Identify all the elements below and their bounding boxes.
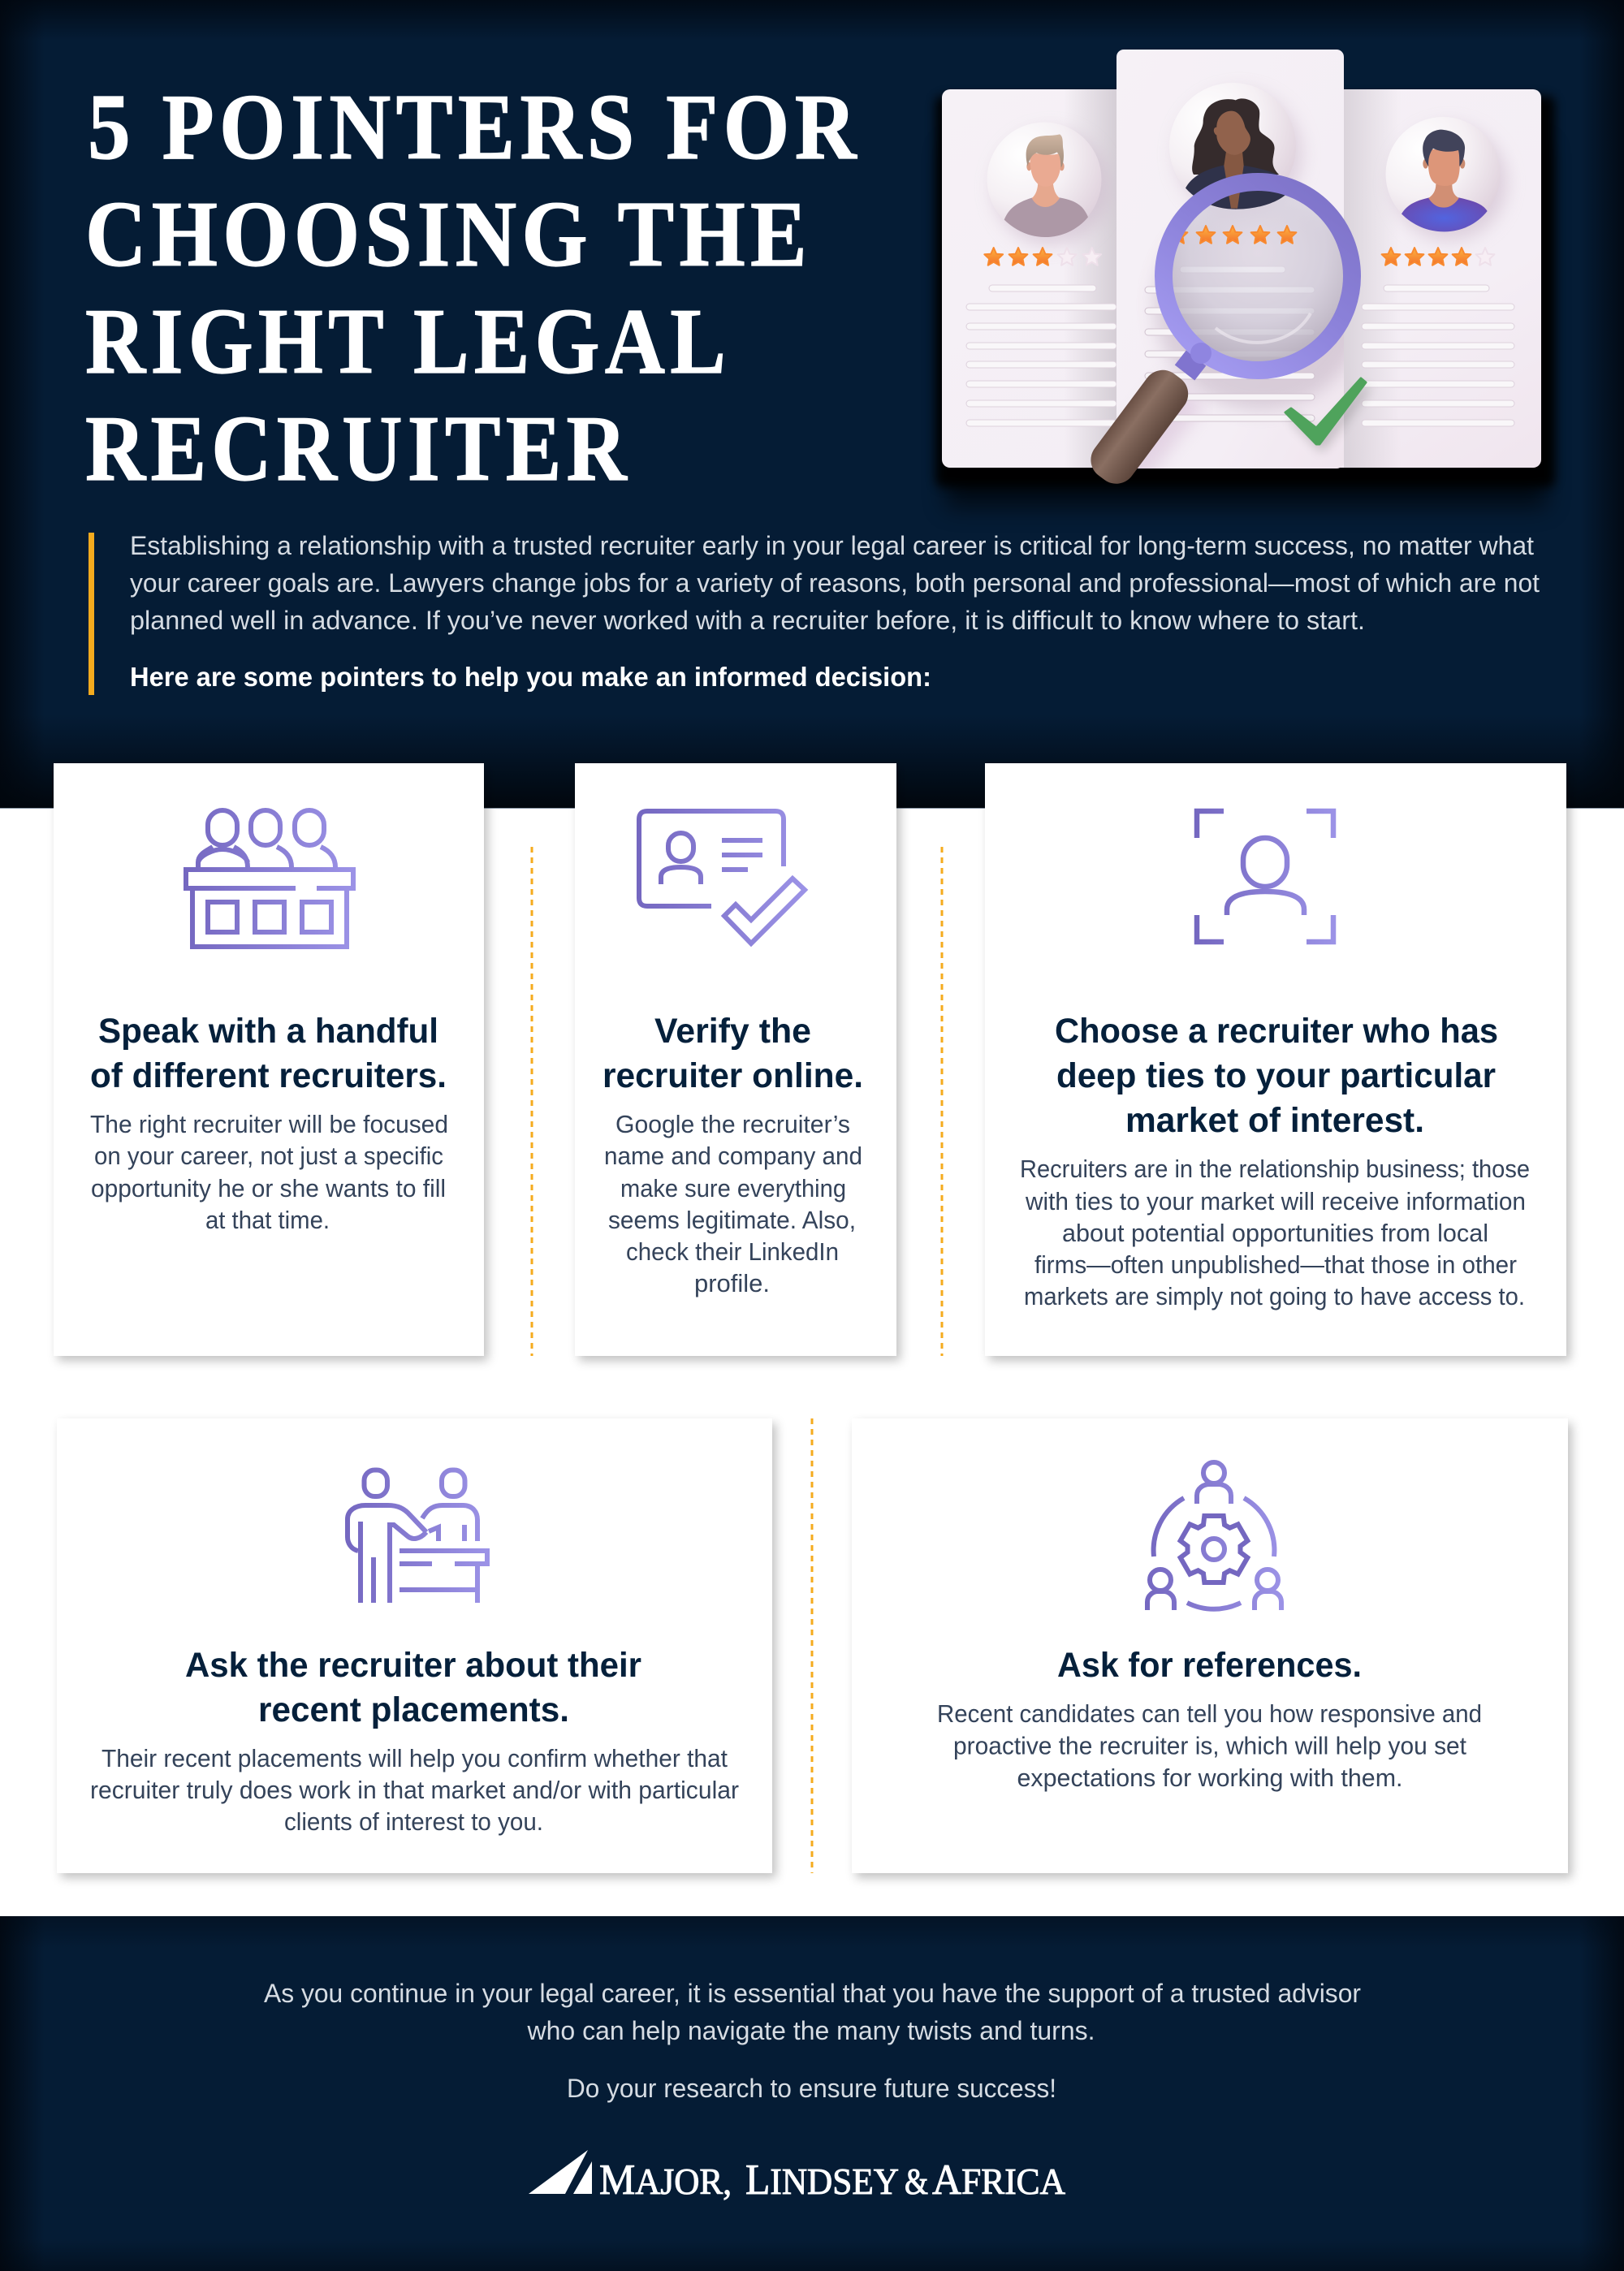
intro text xyxy=(130,531,1540,692)
right text lines xyxy=(1362,285,1514,426)
heading: Verify the xyxy=(654,1012,811,1051)
heading: Choose a recruiter who has xyxy=(1055,1012,1498,1051)
center stars xyxy=(1169,226,1296,244)
body text: opportunity he or she wants to fill xyxy=(91,1174,446,1202)
left and right profile sheet xyxy=(942,89,1541,468)
title: 5 POINTERS FOR xyxy=(88,76,862,179)
heading: of different recruiters. xyxy=(90,1056,447,1095)
body text: proactive the recruiter is, which will help you set xyxy=(953,1731,1466,1760)
footer text: who can help navigate the many twists and turns. xyxy=(527,2016,1095,2045)
body text: seems legitimate. Also, xyxy=(608,1206,856,1234)
footer text: As you continue in your legal career, it is essential that you have the support of a trusted advisor xyxy=(264,1979,1361,2008)
body text: Their recent placements will help you confirm whether that xyxy=(102,1744,728,1772)
heading xyxy=(1055,1012,1498,1140)
panel: verify the recruiter xyxy=(575,763,896,1356)
body text: Recent candidates can tell you how responsive and xyxy=(937,1699,1482,1728)
title: CHOOSING THE xyxy=(85,183,812,287)
center sheet soft shading xyxy=(1138,91,1344,468)
icon: sails xyxy=(529,2150,592,2194)
heading: recruiter online. xyxy=(603,1056,863,1095)
body text: Google the recruiter’s xyxy=(615,1110,850,1138)
footer text: Do your research to ensure future success! xyxy=(567,2074,1056,2103)
body text xyxy=(90,1110,448,1234)
body text xyxy=(937,1699,1482,1792)
heading: market of interest. xyxy=(1125,1101,1424,1140)
left stars xyxy=(984,248,1101,266)
intro text: planned well in advance. If you’ve never worked with a recruiter before, it is difficult to know where to start. xyxy=(130,606,1365,635)
body text: check their LinkedIn xyxy=(626,1237,839,1266)
icon: two people shaking hands over desk xyxy=(348,1470,487,1603)
heading: Speak with a handful xyxy=(98,1012,438,1051)
icon: people around gear xyxy=(1147,1462,1281,1610)
intro accent bar xyxy=(89,533,94,695)
heading: Ask for references. xyxy=(1057,1646,1362,1685)
footer band xyxy=(0,1916,1624,2271)
intro text: Establishing a relationship with a trusted recruiter early in your legal career is critical for long-term success, no matter what xyxy=(130,531,1534,560)
logo: Major, Lindsey & Africa: AFRICA xyxy=(932,2157,1065,2204)
body text: make sure everything xyxy=(620,1174,846,1202)
heading: deep ties to your particular xyxy=(1056,1056,1496,1095)
logo: Major, Lindsey & Africa: LINDSEY xyxy=(745,2157,899,2204)
body text: name and company and xyxy=(604,1142,862,1170)
body text: expectations for working with them. xyxy=(1017,1764,1403,1792)
left avatar xyxy=(987,122,1108,245)
logo: Major, Lindsey & Africa: MAJOR, xyxy=(599,2157,732,2204)
logo: Major, Lindsey & Africa: & xyxy=(905,2161,928,2202)
body text: on your career, not just a specific xyxy=(94,1142,443,1170)
body text: The right recruiter will be focused xyxy=(90,1110,448,1138)
body text xyxy=(604,1110,862,1297)
intro text: Here are some pointers to help you make an informed decision: xyxy=(130,662,931,692)
body text: with ties to your market will receive information xyxy=(1025,1187,1526,1215)
center avatar xyxy=(1169,83,1296,209)
center text lines xyxy=(1145,266,1315,421)
body text: firms—often unpublished—that those in other xyxy=(1034,1250,1517,1279)
heading: Ask the recruiter about their xyxy=(185,1646,641,1685)
body text: profile. xyxy=(694,1269,770,1297)
body text xyxy=(90,1744,739,1836)
body text: at that time. xyxy=(205,1206,330,1234)
hero illustration: candidate profiles under magnifying glass xyxy=(935,50,1555,507)
panel: ask for references xyxy=(852,1418,1568,1873)
right avatar xyxy=(1385,117,1507,240)
title: RECRUITER xyxy=(85,397,632,501)
panel: deep ties to market xyxy=(985,763,1566,1356)
body text: Recruiters are in the relationship business; those xyxy=(1020,1155,1530,1183)
right stars xyxy=(1382,248,1494,266)
body text: markets are simply not going to have access to. xyxy=(1024,1282,1525,1310)
intro text: your career goals are. Lawyers change jobs for a variety of reasons, both personal and professional—most of which are not xyxy=(130,568,1540,598)
body text xyxy=(1020,1155,1530,1310)
dotted separators xyxy=(532,847,942,1873)
panel: speak with recruiters xyxy=(54,763,484,1356)
title: RIGHT LEGAL xyxy=(85,290,731,394)
title xyxy=(85,76,862,501)
heading xyxy=(185,1646,641,1729)
center profile sheet xyxy=(1116,50,1344,468)
heading xyxy=(603,1012,863,1095)
heading xyxy=(90,1012,447,1095)
icon: three people behind desk xyxy=(186,810,353,947)
magnifying glass xyxy=(1083,182,1352,491)
footer text xyxy=(264,1979,1361,2103)
left text lines xyxy=(966,285,1116,426)
green check mark xyxy=(1285,378,1370,451)
header band xyxy=(0,0,1624,809)
icon: person in focus frame xyxy=(1197,811,1333,942)
magnifier lens xyxy=(1172,191,1344,363)
panel: recent placements xyxy=(57,1418,772,1873)
icon: ID card with check mark xyxy=(639,811,805,943)
body text: clients of interest to you. xyxy=(284,1807,543,1836)
heading: recent placements. xyxy=(258,1690,569,1729)
body text: recruiter truly does work in that market and/or with particular xyxy=(90,1776,739,1804)
body text: about potential opportunities from local xyxy=(1062,1219,1488,1247)
logo: Major, Lindsey & Africa xyxy=(529,2150,1065,2204)
